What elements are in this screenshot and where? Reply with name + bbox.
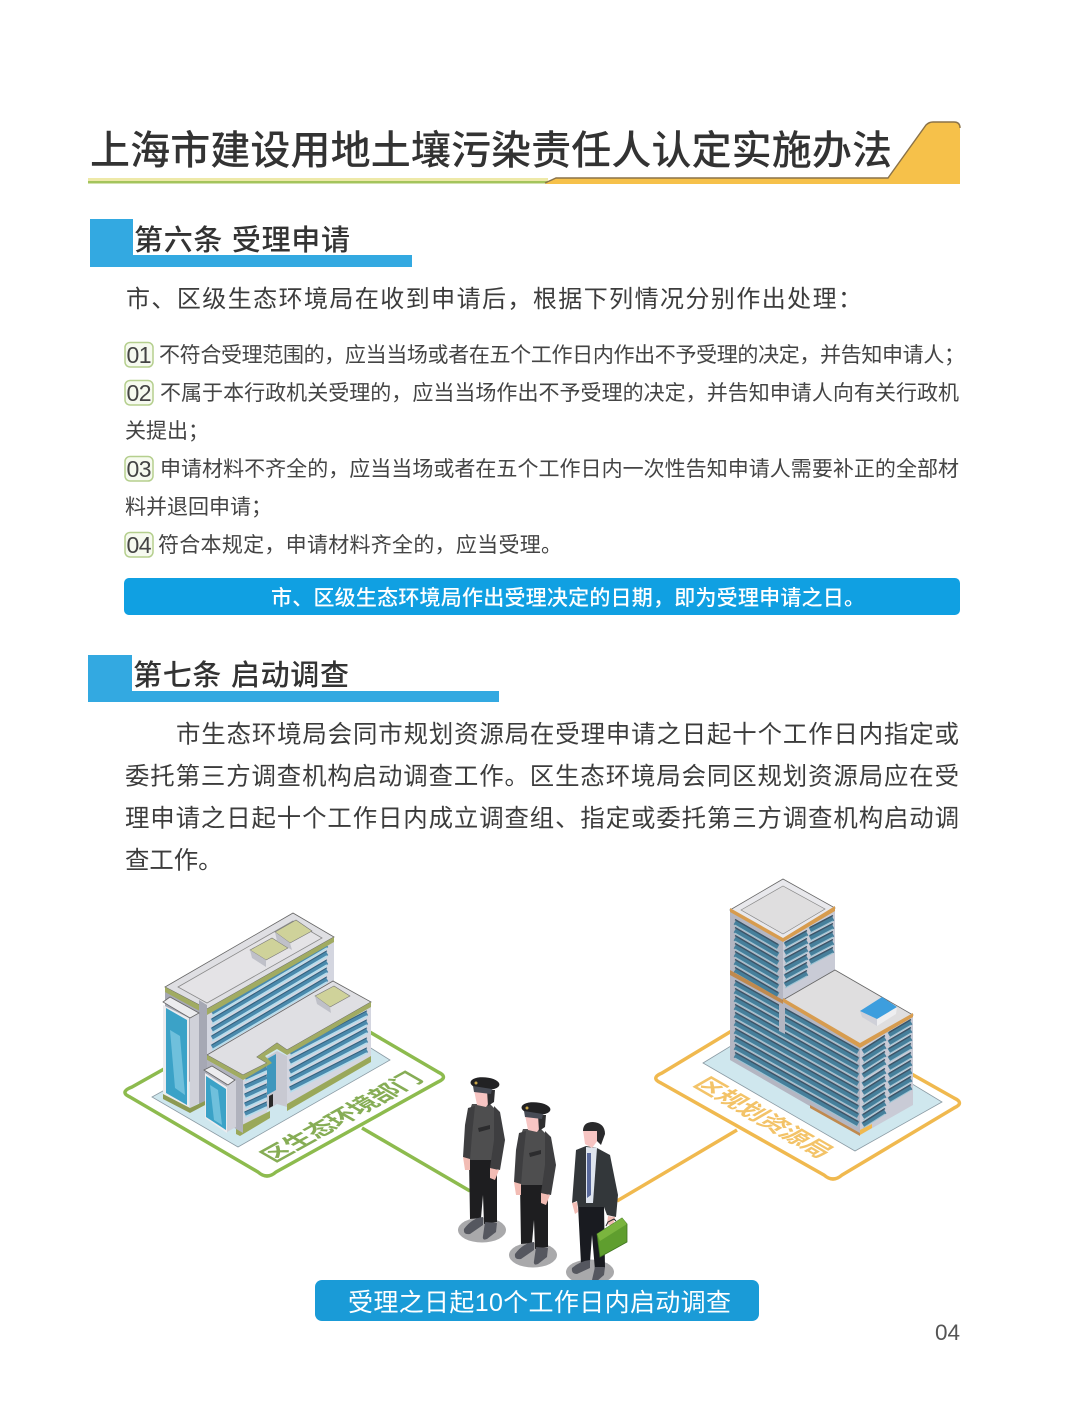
article 7 paragraph	[125, 722, 959, 874]
glass tower	[163, 997, 207, 1113]
rooftop blue box	[860, 997, 897, 1026]
small glass tower	[204, 1066, 236, 1133]
bureau label: 区规划资源局	[687, 1074, 839, 1162]
briefcase	[597, 1218, 627, 1257]
lower block	[207, 981, 371, 1136]
platform outline	[656, 1004, 960, 1179]
section heading: article 6: 第六条 受理申请	[134, 224, 350, 257]
figure: investigator 2	[509, 1101, 557, 1268]
connector line: orange	[617, 1130, 737, 1201]
item 03: 料并退回申请；	[125, 496, 272, 519]
caption pill	[315, 1280, 759, 1321]
page number: 04	[935, 1320, 960, 1345]
section heading: article 7: 第七条 启动调查	[133, 659, 349, 692]
upper block	[165, 913, 334, 1090]
item 03: 03	[126, 456, 152, 482]
item 01: 01	[126, 342, 152, 368]
roofs	[730, 879, 913, 1048]
item 02	[125, 380, 959, 443]
platform outline	[125, 994, 443, 1176]
figure: investigator 1	[458, 1076, 506, 1242]
illustration: district ecology department	[125, 913, 443, 1176]
building base	[152, 1010, 390, 1147]
caption pill: 受理之日起10个工作日内启动调查	[348, 1289, 731, 1317]
item 04: 符合本规定，申请材料齐全的，应当受理。	[158, 534, 562, 557]
title underline with yellow tab	[88, 122, 960, 184]
blue note banner: 市、区级生态环境局作出受理决定的日期，即为受理申请之日。	[271, 587, 865, 610]
tower walls	[730, 908, 913, 1136]
item 02: 02	[126, 380, 152, 406]
blue note banner	[124, 578, 960, 615]
department label: 区生态环境部门	[255, 1069, 430, 1166]
connector line: green	[362, 1128, 470, 1191]
item 01: 不符合受理范围的，应当当场或者在五个工作日内作出不予受理的决定，并告知申请人；	[159, 344, 965, 367]
figure: businessman with briefcase	[566, 1122, 627, 1284]
article 7 paragraph: 理申请之日起十个工作日内成立调查组、指定或委托第三方调查机构启动调	[125, 806, 959, 832]
section heading: article 7	[88, 655, 499, 702]
article 7 paragraph: 查工作。	[125, 848, 223, 874]
item 02: 不属于本行政机关受理的，应当当场作出不予受理的决定，并告知申请人向有关行政机	[160, 382, 959, 405]
item 02: 关提出；	[125, 420, 209, 443]
item 04: 04	[126, 532, 152, 558]
intro sentence: 市、区级生态环境局在收到申请后，根据下列情况分别作出处理：	[126, 286, 862, 313]
illustration: district planning bureau	[656, 879, 960, 1179]
item 03: 申请材料不齐全的，应当当场或者在五个工作日内一次性告知申请人需要补正的全部材	[160, 458, 959, 481]
item 03	[125, 456, 959, 519]
building base	[703, 1010, 942, 1151]
section heading: article 6	[90, 219, 412, 267]
article 7 paragraph: 委托第三方调查机构启动调查工作。区生态环境局会同区规划资源局应在受	[125, 764, 959, 790]
numbered list	[125, 342, 965, 558]
article 7 paragraph: 市生态环境局会同市规划资源局在受理申请之日起十个工作日内指定或	[176, 722, 959, 748]
title: 上海市建设用地土壤污染责任人认定实施办法	[90, 129, 892, 173]
